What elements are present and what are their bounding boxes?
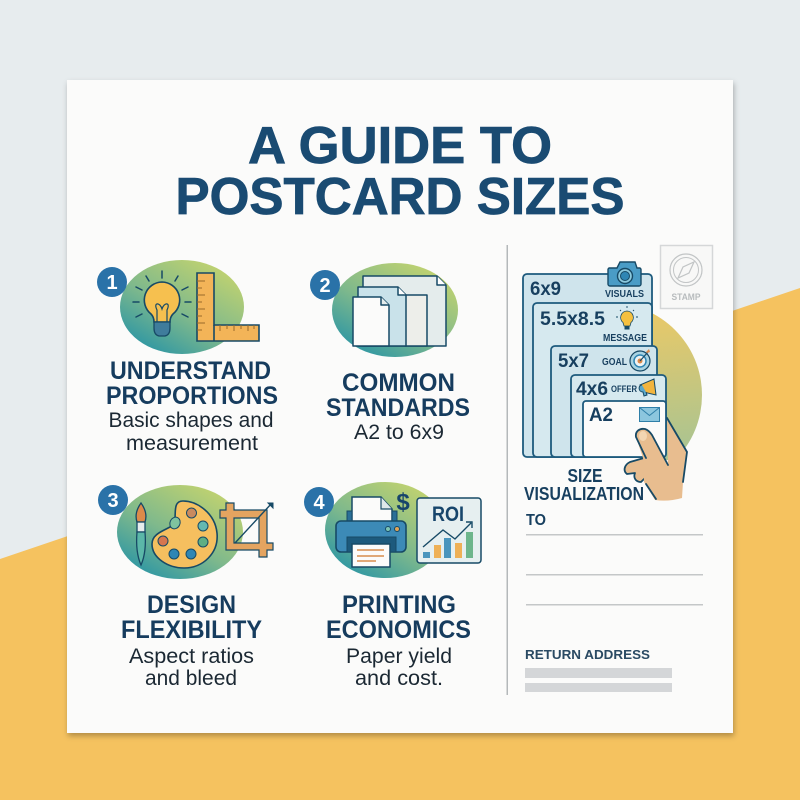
- description: A2 to 6x9: [354, 421, 444, 444]
- number badge 2: 2: [319, 275, 331, 297]
- heading: [121, 591, 262, 644]
- description: [108, 409, 274, 455]
- heading: ECONOMICS: [326, 616, 471, 644]
- size card 5.5x8.5: [533, 303, 652, 457]
- stamp: [660, 246, 712, 308]
- icon: hand holding card: [625, 418, 687, 501]
- description: [346, 645, 452, 690]
- caption: size visualization: VISUALIZATION: [524, 484, 644, 504]
- number badge 4: 4: [313, 492, 325, 514]
- number badge 1: 1: [106, 272, 118, 294]
- caption: size visualization: SIZE: [568, 466, 602, 486]
- icon: printer and ROI chart: $: [396, 489, 410, 516]
- return address: RETURN ADDRESS: [525, 647, 650, 662]
- icon: palette, brush and crop: [117, 485, 273, 579]
- stamp: STAMP: [672, 292, 701, 303]
- heading: PROPORTIONS: [106, 382, 278, 410]
- icon: light bulb and ruler: [120, 260, 259, 354]
- size card 5.5x8.5: 5.5x8.5: [540, 309, 605, 330]
- panel: common standards: [310, 263, 470, 444]
- address block: to: TO: [526, 512, 546, 529]
- icon: camera: [608, 262, 641, 286]
- size card 5x7: GOAL: [602, 356, 627, 368]
- size card A2: [583, 401, 666, 457]
- title: A GUIDE TO: [248, 117, 552, 175]
- number badge 3: [98, 485, 128, 515]
- icon: target: [630, 349, 650, 371]
- size card 5.5x8.5: MESSAGE: [603, 332, 647, 344]
- panel: understand proportions: [97, 260, 278, 455]
- heading: [326, 369, 470, 422]
- panel: printing economics: [304, 482, 481, 690]
- size card 6x9: 6x9: [530, 279, 561, 300]
- size visualization diagram: [518, 262, 702, 504]
- description: Paper yield: [346, 645, 452, 668]
- postcard panel: [67, 80, 733, 733]
- heading: FLEXIBILITY: [121, 616, 262, 644]
- icon: small bulb: [616, 306, 638, 330]
- icon: printer and ROI chart: [325, 482, 481, 578]
- heading: [326, 591, 471, 644]
- size card 5x7: 5x7: [558, 351, 589, 372]
- number badge 1: [97, 267, 127, 297]
- size card 4x6: OFFER: [611, 384, 637, 395]
- size card 4x6: [571, 375, 666, 457]
- number badge 3: 3: [107, 490, 119, 512]
- heading: DESIGN: [147, 591, 236, 619]
- icon: envelope: [640, 408, 660, 422]
- panel: design flexibility: [98, 485, 273, 690]
- number badge 2: [310, 270, 340, 300]
- title: POSTCARD SIZES: [176, 168, 624, 226]
- return address: [525, 647, 672, 692]
- size card 6x9: [523, 274, 652, 457]
- heading: PRINTING: [342, 591, 456, 619]
- size card A2: A2: [589, 405, 613, 426]
- heading: COMMON: [342, 369, 455, 397]
- description: Aspect ratios: [129, 645, 254, 668]
- size card 6x9: VISUALS: [605, 288, 644, 300]
- heading: STANDARDS: [326, 394, 470, 422]
- heading: [106, 357, 278, 410]
- description: Basic shapes and: [108, 409, 274, 432]
- icon: paper stack: [332, 263, 458, 357]
- icon: megaphone: [639, 379, 656, 396]
- icon: printer and ROI chart: ROI: [432, 503, 464, 526]
- title: [176, 117, 624, 226]
- description: and bleed: [145, 667, 237, 690]
- caption: size visualization: [524, 466, 644, 504]
- number badge 4: [304, 487, 334, 517]
- description: [129, 645, 254, 690]
- description: and cost.: [355, 667, 443, 690]
- description: measurement: [126, 432, 258, 455]
- size card 4x6: 4x6: [576, 379, 608, 400]
- heading: UNDERSTAND: [110, 357, 271, 385]
- size card 5x7: [551, 346, 657, 457]
